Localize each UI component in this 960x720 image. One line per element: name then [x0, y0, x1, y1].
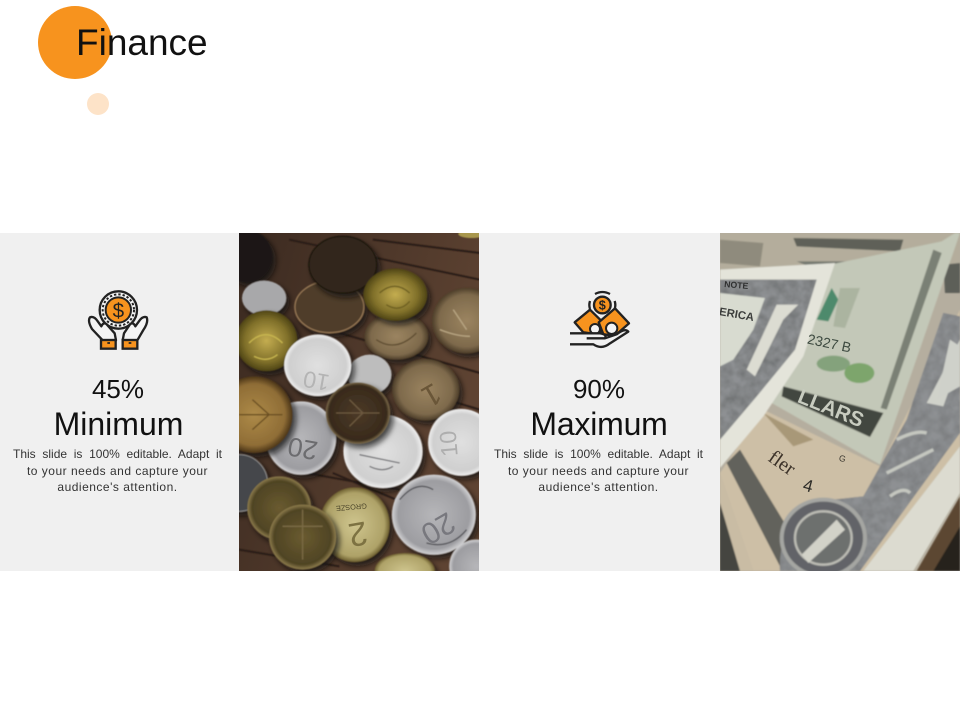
photo: banknotes: G	[838, 453, 847, 464]
icon: hand holding money: $	[599, 299, 606, 313]
text block: description: audience's attention.	[57, 480, 178, 494]
text block: description: to your needs and capture your	[27, 464, 208, 478]
top left bill	[720, 263, 835, 468]
printed banknote legends: 2327 B	[806, 331, 853, 356]
stat: 45%: 45%	[92, 374, 144, 404]
panel: maximum	[479, 233, 720, 571]
lower left bill	[720, 310, 960, 571]
text block: description: This slide is 100% editable. Adapt it	[13, 447, 222, 461]
stat: 90%: 90%	[573, 374, 625, 404]
decorative large orange circle	[38, 6, 112, 79]
photo: coins: GROSZE	[335, 501, 367, 513]
twenty dollar bill	[772, 233, 960, 465]
photo: coins: 10	[434, 430, 463, 458]
decorative small peach circle	[87, 93, 109, 115]
photo: banknotes: 4	[801, 475, 816, 497]
text block: description: This slide is 100% editable. Adapt it	[494, 447, 703, 461]
text block: description: audience's attention.	[538, 480, 659, 494]
text block: description	[13, 447, 222, 494]
icon: hands holding dollar coin: $	[113, 299, 125, 322]
panel: minimum	[0, 233, 239, 571]
icon: hands holding dollar coin	[88, 290, 148, 350]
photo: banknotes: LLARS	[795, 385, 867, 432]
heading: maximum: Maximum	[530, 406, 668, 442]
photo: coins: 20	[415, 505, 461, 550]
photo: coins: 2	[346, 514, 370, 553]
photo: banknotes: fler	[764, 446, 800, 480]
photo: banknotes: NOTE	[724, 279, 749, 291]
photo: coins	[239, 233, 479, 571]
engraved denominations on coins: 10	[301, 366, 331, 396]
text block: description	[494, 447, 703, 494]
photo: banknotes	[720, 233, 960, 571]
title: Finance	[76, 22, 208, 63]
heading: minimum: Minimum	[54, 406, 183, 442]
photo: coins: 20	[285, 431, 320, 466]
text block: description: to your needs and capture your	[508, 464, 689, 478]
icon: hand holding money	[570, 290, 630, 348]
photo: coins: 1	[416, 376, 447, 413]
